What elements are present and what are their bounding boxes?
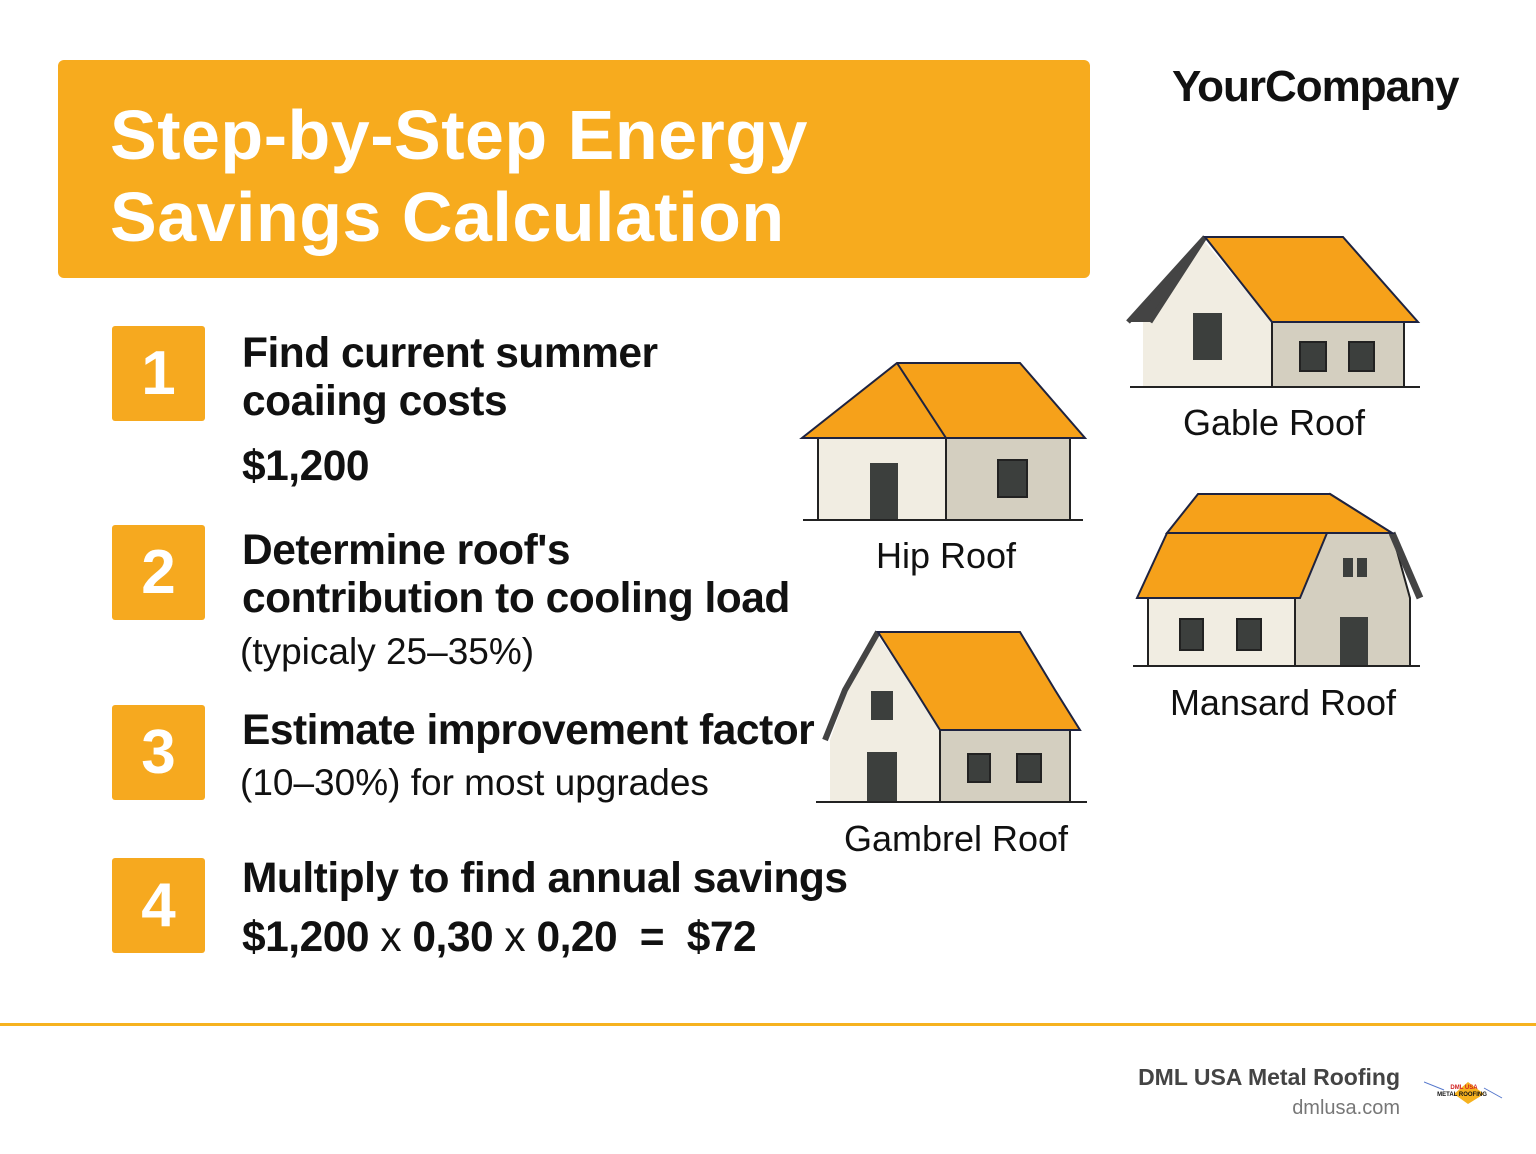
step 1 text: Find current summer xyxy=(242,330,658,377)
footer divider xyxy=(0,1023,1536,1026)
footer url: dmlusa.com xyxy=(1292,1097,1400,1119)
step 2 text: Determine roof's xyxy=(242,527,570,574)
label: mansard roof: Mansard Roof xyxy=(1170,682,1396,723)
step 4 formula: $1,200 x 0,30 x 0,20 = $72 xyxy=(242,914,756,961)
title xyxy=(110,96,808,256)
title: Savings Calculation xyxy=(110,178,785,256)
step 4 text: Multiply to find annual savings xyxy=(242,855,848,902)
step 1 text: coaiing costs xyxy=(242,378,507,425)
label: gable roof: Gable Roof xyxy=(1183,402,1365,443)
icon: hip roof house xyxy=(802,363,1085,520)
icon: mansard roof house xyxy=(1133,494,1420,666)
brand: YourCompany xyxy=(1172,62,1458,111)
label: hip roof: Hip Roof xyxy=(876,535,1016,576)
badge 4: 4 xyxy=(141,871,176,940)
title: Step-by-Step Energy xyxy=(110,96,808,174)
footer company: DML USA Metal Roofing xyxy=(1138,1064,1400,1090)
title banner xyxy=(58,60,1090,278)
step 3 text: Estimate improvement factor xyxy=(242,707,814,754)
step 1 value: $1,200 xyxy=(242,443,369,490)
footer logo xyxy=(1424,1082,1502,1104)
step 4 xyxy=(112,855,848,961)
step 3 note: (10–30%) for most upgrades xyxy=(240,762,709,803)
badge 4 xyxy=(112,858,205,953)
step 2 text xyxy=(242,527,790,622)
badge 2: 2 xyxy=(141,538,176,607)
step 1 xyxy=(112,326,658,490)
step 2 xyxy=(112,525,790,672)
step 2 text: contribution to cooling load xyxy=(242,575,790,622)
step 1 text xyxy=(242,330,658,425)
step 3 xyxy=(112,705,814,803)
badge 1: 1 xyxy=(141,339,176,408)
label: gambrel roof: Gambrel Roof xyxy=(844,818,1068,859)
badge 2 xyxy=(112,525,205,620)
footer logo: DML USA xyxy=(1450,1085,1478,1091)
badge 3 xyxy=(112,705,205,800)
step 2 note: (typicaly 25–35%) xyxy=(240,631,534,672)
icon: gambrel roof house xyxy=(816,632,1087,802)
badge 3: 3 xyxy=(141,718,176,787)
footer logo: METAL ROOFING xyxy=(1437,1092,1487,1098)
icon: gable roof house xyxy=(1128,237,1420,387)
badge 1 xyxy=(112,326,205,421)
